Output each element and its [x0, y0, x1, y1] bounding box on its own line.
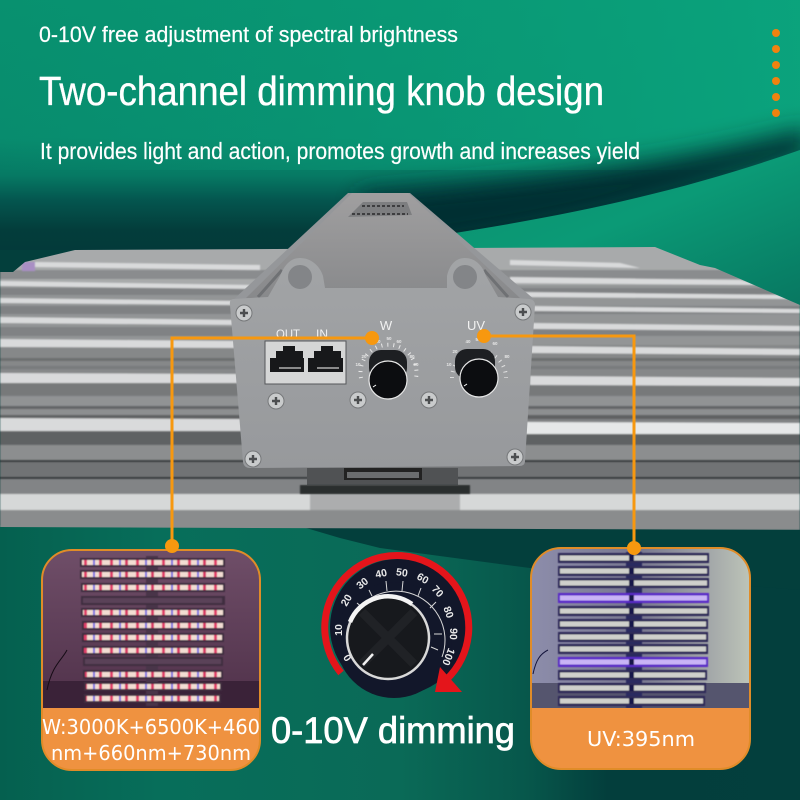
RJ45 ports	[265, 341, 346, 384]
scale numbers: 90	[447, 628, 459, 640]
card: W spectrum	[42, 550, 260, 770]
knob: W: 90	[413, 362, 419, 367]
port labels: OUT	[276, 327, 301, 341]
knob: W: 50	[386, 336, 392, 341]
knob: W: 40	[375, 339, 381, 344]
mounting ear holes	[288, 265, 477, 289]
screws	[236, 304, 531, 467]
title: eyebrow line: 0-10V free adjustment of spectral brightness	[39, 22, 458, 47]
scale numbers: 70	[429, 583, 446, 600]
knob: W	[355, 336, 419, 399]
knob: UV: 10	[446, 362, 452, 367]
card: UV spectrum	[531, 548, 750, 769]
orange leader line: UV	[477, 329, 641, 555]
card caption: nm+660nm+730nm	[51, 741, 251, 765]
card caption: UV:395nm	[587, 727, 695, 751]
card caption	[42, 715, 260, 765]
driver box housing	[233, 193, 535, 300]
knob: UV: 60	[492, 341, 498, 346]
scale numbers: 100	[439, 646, 457, 667]
red direction arrow	[325, 555, 469, 680]
title: main heading: Two-channel dimming knob design	[39, 68, 604, 114]
photo: full-spectrum light bars	[42, 550, 260, 708]
port labels	[276, 327, 328, 341]
knob: UV: 40	[465, 339, 471, 344]
scale numbers: 40	[374, 567, 388, 581]
fin shadow lines	[258, 270, 508, 297]
dial face	[330, 559, 466, 698]
knob pointer	[363, 654, 373, 665]
knob: W: 10	[355, 362, 361, 367]
scale numbers	[333, 566, 459, 667]
card caption: W:3000K+6500K+460	[42, 715, 260, 739]
product label	[348, 202, 412, 217]
scale numbers: 10	[333, 624, 345, 636]
scale arc	[347, 591, 445, 657]
dimmer dial illustration	[325, 555, 469, 698]
aluminium heat-sink rails	[0, 240, 800, 530]
subtitle: It provides light and action, promotes growth and increases yield	[40, 138, 640, 164]
scale numbers: 20	[339, 592, 355, 609]
channel label UV: UV	[467, 318, 485, 333]
knob: UV	[446, 337, 510, 397]
scale numbers: 30	[354, 575, 371, 592]
photo: UV light bars	[531, 548, 750, 708]
knob: UV: 80	[504, 354, 510, 359]
knob: W: 60	[396, 339, 402, 344]
channel label W: W	[380, 318, 393, 333]
knob: UV: 50	[475, 337, 481, 342]
decorative orange dots	[772, 29, 780, 117]
knob	[347, 596, 429, 679]
knob: W: 20	[361, 354, 367, 359]
knob: W: 80	[409, 354, 415, 359]
port labels: IN	[316, 327, 328, 341]
front plate	[230, 258, 535, 468]
bottom bracket	[300, 468, 470, 494]
knob: UV: 20	[452, 349, 458, 354]
scale numbers: 80	[440, 605, 456, 620]
orange leader line: W	[165, 331, 379, 553]
label: 0-10V dimming: 0-10V dimming	[271, 710, 515, 751]
scale numbers: 50	[395, 566, 409, 580]
scale numbers: 0	[341, 651, 354, 663]
scale numbers: 60	[414, 571, 431, 587]
